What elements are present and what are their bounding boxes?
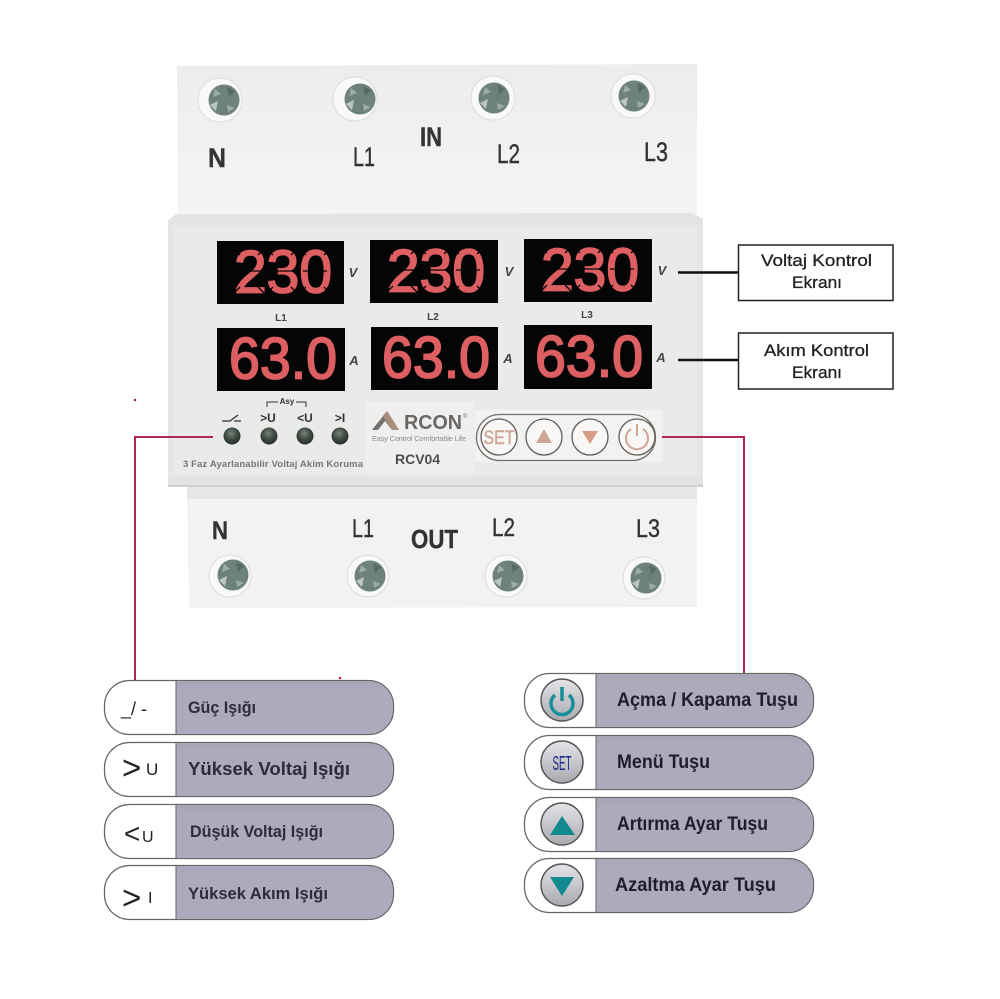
- unit and phase labels: V: [505, 264, 515, 279]
- bottom terminal block: [187, 485, 697, 608]
- legend row: power light: _/ -: [120, 699, 147, 720]
- output terminal labels: L3: [636, 515, 660, 543]
- callout: current control screen: Akım Kontrol: [764, 341, 869, 360]
- output terminal labels: N: [212, 517, 228, 545]
- unit and phase labels: L2: [427, 312, 439, 323]
- brand logo: RCV04: [395, 451, 440, 467]
- brand logo: [366, 402, 474, 474]
- control buttons: [475, 410, 662, 462]
- screw terminal L3: [611, 74, 655, 118]
- output terminal labels: L2: [492, 514, 515, 542]
- callout: voltage control screen: [738, 245, 893, 300]
- display L1 voltage: 230: [234, 238, 332, 306]
- connector: current display callout: [678, 359, 739, 361]
- display L3 current: 63.0: [535, 324, 643, 390]
- screw terminal L2: [485, 555, 527, 597]
- legend row: high voltage light: [104, 742, 394, 796]
- unit and phase labels: [275, 263, 668, 368]
- unit and phase labels: V: [658, 263, 668, 278]
- unit and phase labels: V: [349, 265, 359, 280]
- legend row: high current light: [104, 866, 394, 920]
- input terminal labels: [208, 122, 668, 173]
- legend row: power light: Güç Işığı: [188, 698, 256, 717]
- legend row: on off button: [524, 674, 814, 728]
- indicator labels: Asy: [280, 397, 295, 406]
- front panel: [168, 224, 703, 486]
- panel caption: 3 Faz Ayarlanabilir Voltaj Akim Koruma: [183, 459, 364, 470]
- connector: voltage display callout: [678, 271, 739, 274]
- legend row: high current light: Yüksek Akım Işığı: [188, 884, 328, 903]
- screw terminal L1: [347, 555, 389, 597]
- unit and phase labels: A: [348, 353, 359, 368]
- indicator lights: [224, 428, 348, 444]
- legend row: decrease button: Azaltma Ayar Tuşu: [615, 875, 776, 896]
- legend: buttons: [524, 674, 814, 912]
- button up: [526, 419, 562, 455]
- legend row: increase button: [524, 798, 814, 852]
- legend row: on off button: Açma / Kapama Tuşu: [617, 690, 798, 711]
- device: din rail relay: [168, 64, 703, 608]
- display L3 voltage: 230: [541, 236, 639, 304]
- legend row: power light: [104, 680, 394, 734]
- screw terminal L2: [471, 76, 515, 120]
- callout: voltage control screen: Voltaj Kontrol: [761, 251, 872, 270]
- top terminal block: [168, 64, 703, 232]
- voltage displays: [217, 236, 652, 306]
- legend row: increase button: Artırma Ayar Tuşu: [617, 814, 768, 835]
- screw terminal N: [209, 555, 251, 597]
- display L2 voltage: 230: [387, 238, 485, 304]
- display L2 current: 63.0: [382, 326, 490, 390]
- legend row: low voltage light: U: [142, 829, 154, 846]
- screw terminal L1: [333, 77, 377, 121]
- arrow: indicator lights to legend: [135, 437, 213, 680]
- unit and phase labels: A: [502, 351, 513, 366]
- legend row: menu button: SET: [552, 753, 572, 775]
- legend row: high voltage light: Yüksek Voltaj Işığı: [188, 759, 350, 779]
- screw terminal L3: [623, 557, 665, 599]
- indicator labels: >I: [335, 411, 345, 425]
- legend row: low voltage light: <: [124, 818, 140, 849]
- legend: indicator lights: [104, 680, 394, 920]
- legend row: high voltage light: >: [122, 749, 141, 786]
- output terminal labels: [212, 514, 660, 554]
- input terminal labels: L1: [353, 142, 375, 172]
- indicator labels: <U: [297, 411, 313, 425]
- indicator labels: [222, 397, 345, 425]
- button down: [572, 419, 608, 455]
- callout: voltage control screen: Ekranı: [792, 273, 842, 292]
- button SET: [481, 419, 517, 455]
- legend row: menu button: [524, 736, 814, 790]
- input terminal labels: L2: [497, 139, 520, 169]
- brand logo: Easy Control Comfortable Life: [372, 434, 466, 443]
- legend row: low voltage light: Düşük Voltaj Işığı: [190, 822, 323, 841]
- legend row: high current light: I: [148, 890, 152, 907]
- input terminal labels: N: [208, 143, 226, 173]
- button power: [619, 419, 655, 455]
- segment gaps over displays: [233, 246, 638, 294]
- legend row: high voltage light: U: [146, 760, 158, 779]
- legend row: low voltage light: [104, 804, 394, 858]
- callout: current control screen: Ekranı: [792, 363, 842, 382]
- button SET: SET: [484, 428, 515, 449]
- legend row: high current light: >: [122, 879, 141, 916]
- unit and phase labels: L1: [275, 313, 287, 324]
- brand logo: ®: [463, 413, 468, 420]
- output terminal labels: OUT: [411, 524, 458, 554]
- legend row: menu button: Menü Tuşu: [617, 752, 710, 773]
- input terminal labels: IN: [420, 122, 442, 152]
- current displays: [217, 324, 652, 392]
- arrow: buttons to legend: [662, 437, 744, 673]
- callout: current control screen: [738, 333, 893, 389]
- unit and phase labels: L3: [581, 310, 593, 321]
- unit and phase labels: A: [655, 350, 666, 365]
- brand logo: RCON: [404, 412, 462, 434]
- screw terminal N: [198, 78, 242, 122]
- indicator labels: >U: [260, 411, 276, 425]
- input terminal labels: L3: [644, 137, 668, 167]
- legend row: decrease button: [524, 858, 814, 912]
- output terminal labels: L1: [352, 515, 374, 543]
- display L1 current: 63.0: [229, 326, 337, 392]
